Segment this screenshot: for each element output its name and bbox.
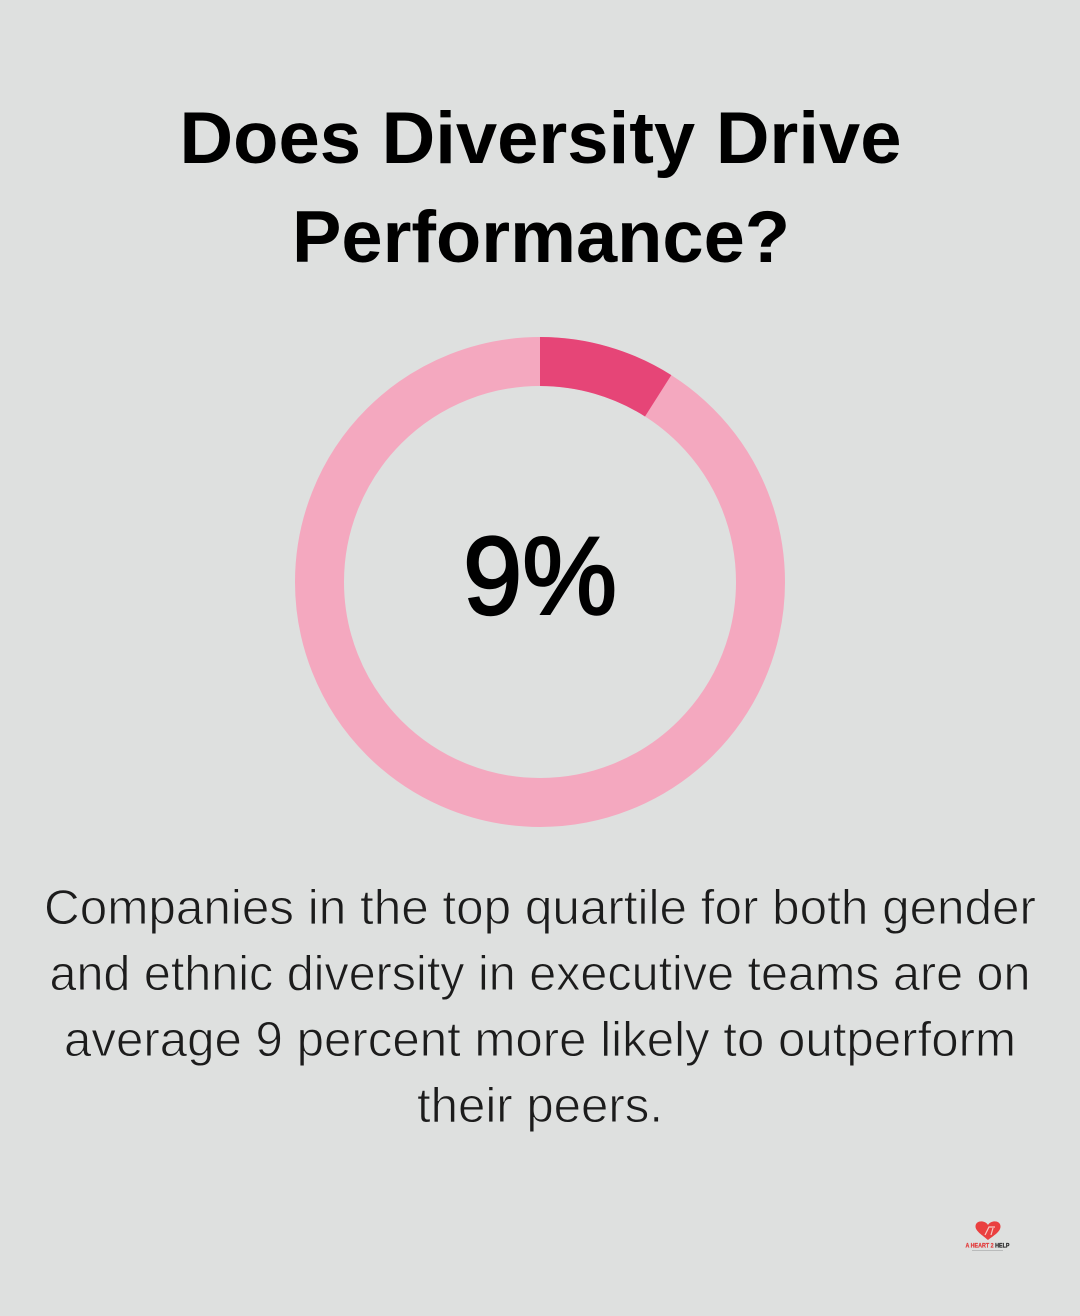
logo: A Heart 2 Help	[966, 1221, 1010, 1251]
icon: figures in heart	[985, 1227, 995, 1235]
body text: average 9 percent more likely to outperform	[64, 1013, 1016, 1067]
body text: and ethnic diversity in executive teams are on	[50, 947, 1030, 1001]
title: Performance?	[292, 197, 790, 278]
logo tagline	[972, 1250, 1003, 1251]
logo text: A HEART 2 HELP	[966, 1244, 1010, 1250]
body text: Companies in the top quartile for both gender	[44, 881, 1036, 935]
title: Does Diversity Drive	[180, 98, 902, 179]
donut highlighted segment: 9%	[540, 337, 671, 416]
body text	[44, 881, 1036, 1133]
body text: their peers.	[417, 1079, 663, 1133]
donut value: 9%	[463, 515, 617, 638]
donut chart	[320, 337, 760, 802]
title	[180, 98, 902, 278]
icon: heart	[976, 1221, 1000, 1240]
donut track	[320, 362, 760, 802]
